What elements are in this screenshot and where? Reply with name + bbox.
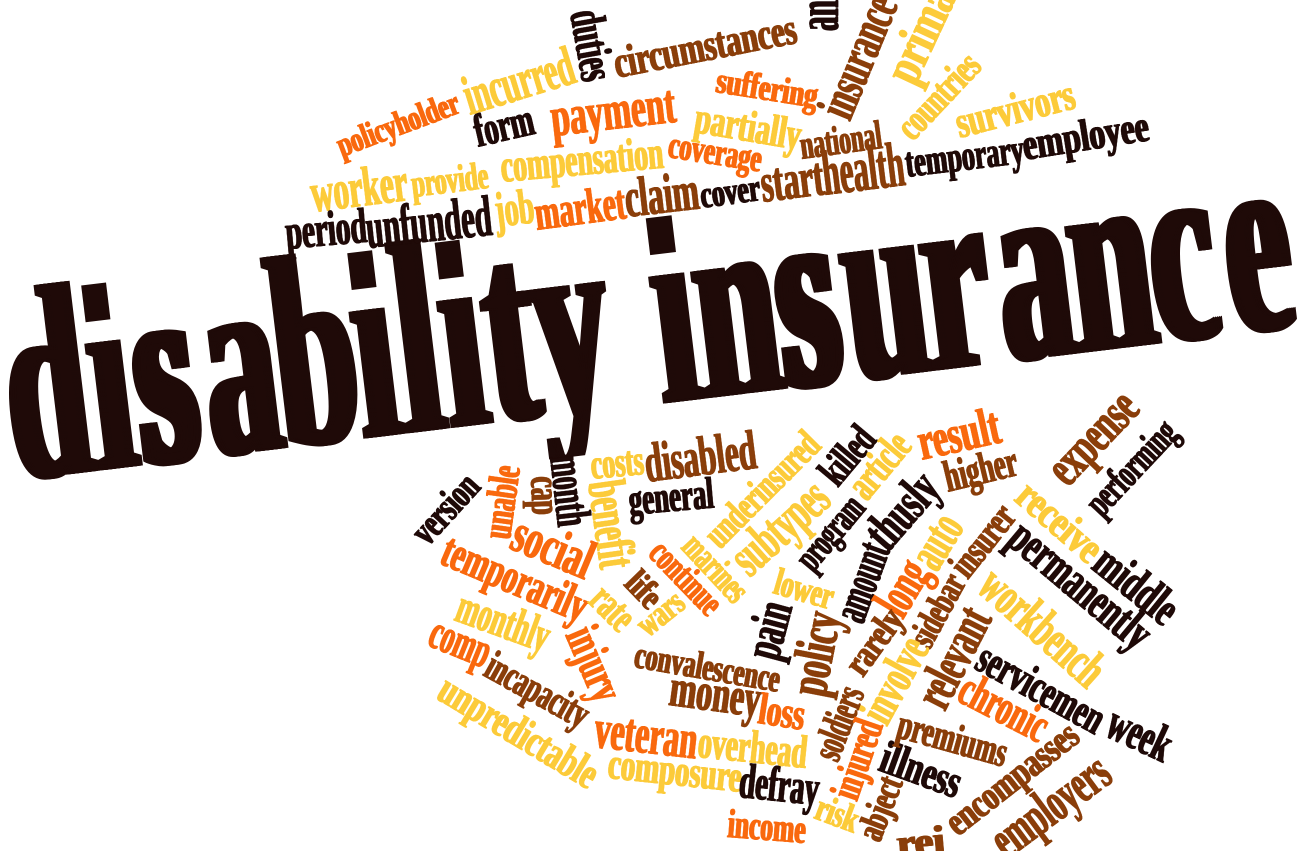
word: wars: wars	[628, 582, 693, 645]
word: general: general	[627, 468, 716, 525]
word: incurred: incurred	[456, 35, 582, 127]
word: costs: costs	[589, 437, 646, 489]
word: loss: loss	[755, 683, 809, 740]
word: disabled: disabled	[641, 419, 760, 495]
word: policy: policy	[777, 606, 854, 700]
word: market: market	[531, 173, 629, 241]
word: pain: pain	[732, 595, 804, 665]
word: job: job	[491, 178, 537, 238]
word: chronic: chronic	[950, 660, 1059, 753]
word: illness: illness	[873, 731, 969, 809]
word: servicemen: servicemen	[968, 632, 1115, 745]
word: composure: composure	[606, 738, 744, 802]
word: temporarily: temporarily	[434, 522, 597, 633]
word: article: article	[836, 421, 921, 508]
word: payment: payment	[547, 73, 679, 149]
word: employee: employee	[1019, 101, 1152, 170]
word: workbench: workbench	[967, 554, 1119, 699]
word: encompasses: encompasses	[935, 711, 1087, 844]
word: continue: continue	[641, 531, 732, 624]
word: week: week	[1098, 694, 1182, 774]
word: money: money	[666, 657, 765, 729]
word: abject: abject	[848, 770, 912, 846]
word: provide: provide	[409, 154, 491, 206]
word: expense: expense	[1033, 377, 1150, 496]
word: coverage: coverage	[666, 123, 765, 181]
square i-dot of insurance	[637, 203, 690, 267]
word: sidebar: sidebar	[900, 566, 975, 654]
word: performing: performing	[1075, 409, 1187, 524]
word: form: form	[469, 94, 539, 158]
top word cluster	[283, 0, 1152, 261]
word: incapacity: incapacity	[477, 643, 598, 738]
word: rate: rate	[580, 574, 647, 641]
word: relevant: relevant	[902, 597, 1003, 717]
word: underinsured: underinsured	[694, 421, 829, 556]
word: unable: unable	[473, 463, 530, 541]
word: duties: duties	[559, 5, 627, 85]
word: monthly: monthly	[449, 578, 559, 663]
bottom word cluster	[401, 377, 1191, 851]
word: policyholder: policyholder	[331, 83, 465, 164]
word: long: long	[862, 548, 942, 626]
word: injured: injured	[822, 713, 893, 805]
word: cover: cover	[698, 166, 763, 217]
word: subtypes: subtypes	[717, 467, 842, 588]
word: social: social	[503, 503, 603, 592]
word: defray: defray	[737, 752, 822, 816]
word: permanently: permanently	[997, 509, 1164, 661]
word: higher: higher	[939, 436, 1022, 502]
word: rarely: rarely	[835, 599, 913, 683]
word: involve: involve	[847, 626, 940, 732]
word: life: life	[617, 563, 671, 617]
word: auto: auto	[896, 502, 975, 579]
word: survivors: survivors	[950, 69, 1080, 148]
title word: disability: disability	[0, 166, 624, 539]
square i-dots and trimmed y tail of disability	[71, 212, 632, 548]
word: overhead: overhead	[696, 716, 810, 779]
word: injury: injury	[555, 617, 636, 709]
word: period: period	[283, 197, 369, 260]
word: unpredictable: unpredictable	[430, 664, 608, 798]
word: benefit: benefit	[576, 476, 648, 572]
word: temporary: temporary	[903, 126, 1027, 187]
word: start: start	[757, 146, 827, 215]
word: marines: marines	[673, 525, 758, 611]
word: veteran: veteran	[592, 698, 701, 772]
word: convalescence: convalescence	[631, 633, 784, 701]
word: claim: claim	[621, 160, 702, 230]
word: killed: killed	[810, 417, 886, 494]
word: middle: middle	[1083, 533, 1191, 636]
word: health: health	[818, 128, 908, 209]
word: program: program	[785, 485, 874, 579]
word: soldiers: soldiers	[803, 680, 874, 767]
word: lower: lower	[770, 560, 839, 618]
word: compensation: compensation	[498, 127, 665, 193]
word: month: month	[539, 452, 603, 529]
word: cap: cap	[521, 476, 569, 515]
word: thusly: thusly	[852, 459, 952, 561]
word: insurer: insurer	[939, 494, 1025, 586]
word: national: national	[797, 111, 884, 168]
main title	[0, 85, 1300, 548]
word: premiums: premiums	[892, 701, 1013, 777]
word: comp: comp	[422, 603, 500, 678]
word: unfunded: unfunded	[363, 183, 495, 261]
word: risk: risk	[810, 786, 865, 842]
word: worker: worker	[307, 152, 411, 225]
word: countries: countries	[886, 42, 990, 148]
word: amount: amount	[821, 534, 901, 629]
word: receive: receive	[1006, 470, 1114, 572]
title word: insurance: insurance	[635, 85, 1300, 462]
word: result: result	[912, 395, 1006, 472]
word: partially: partially	[691, 93, 806, 160]
word: suffering: suffering	[714, 60, 821, 117]
word: version: version	[401, 463, 489, 553]
